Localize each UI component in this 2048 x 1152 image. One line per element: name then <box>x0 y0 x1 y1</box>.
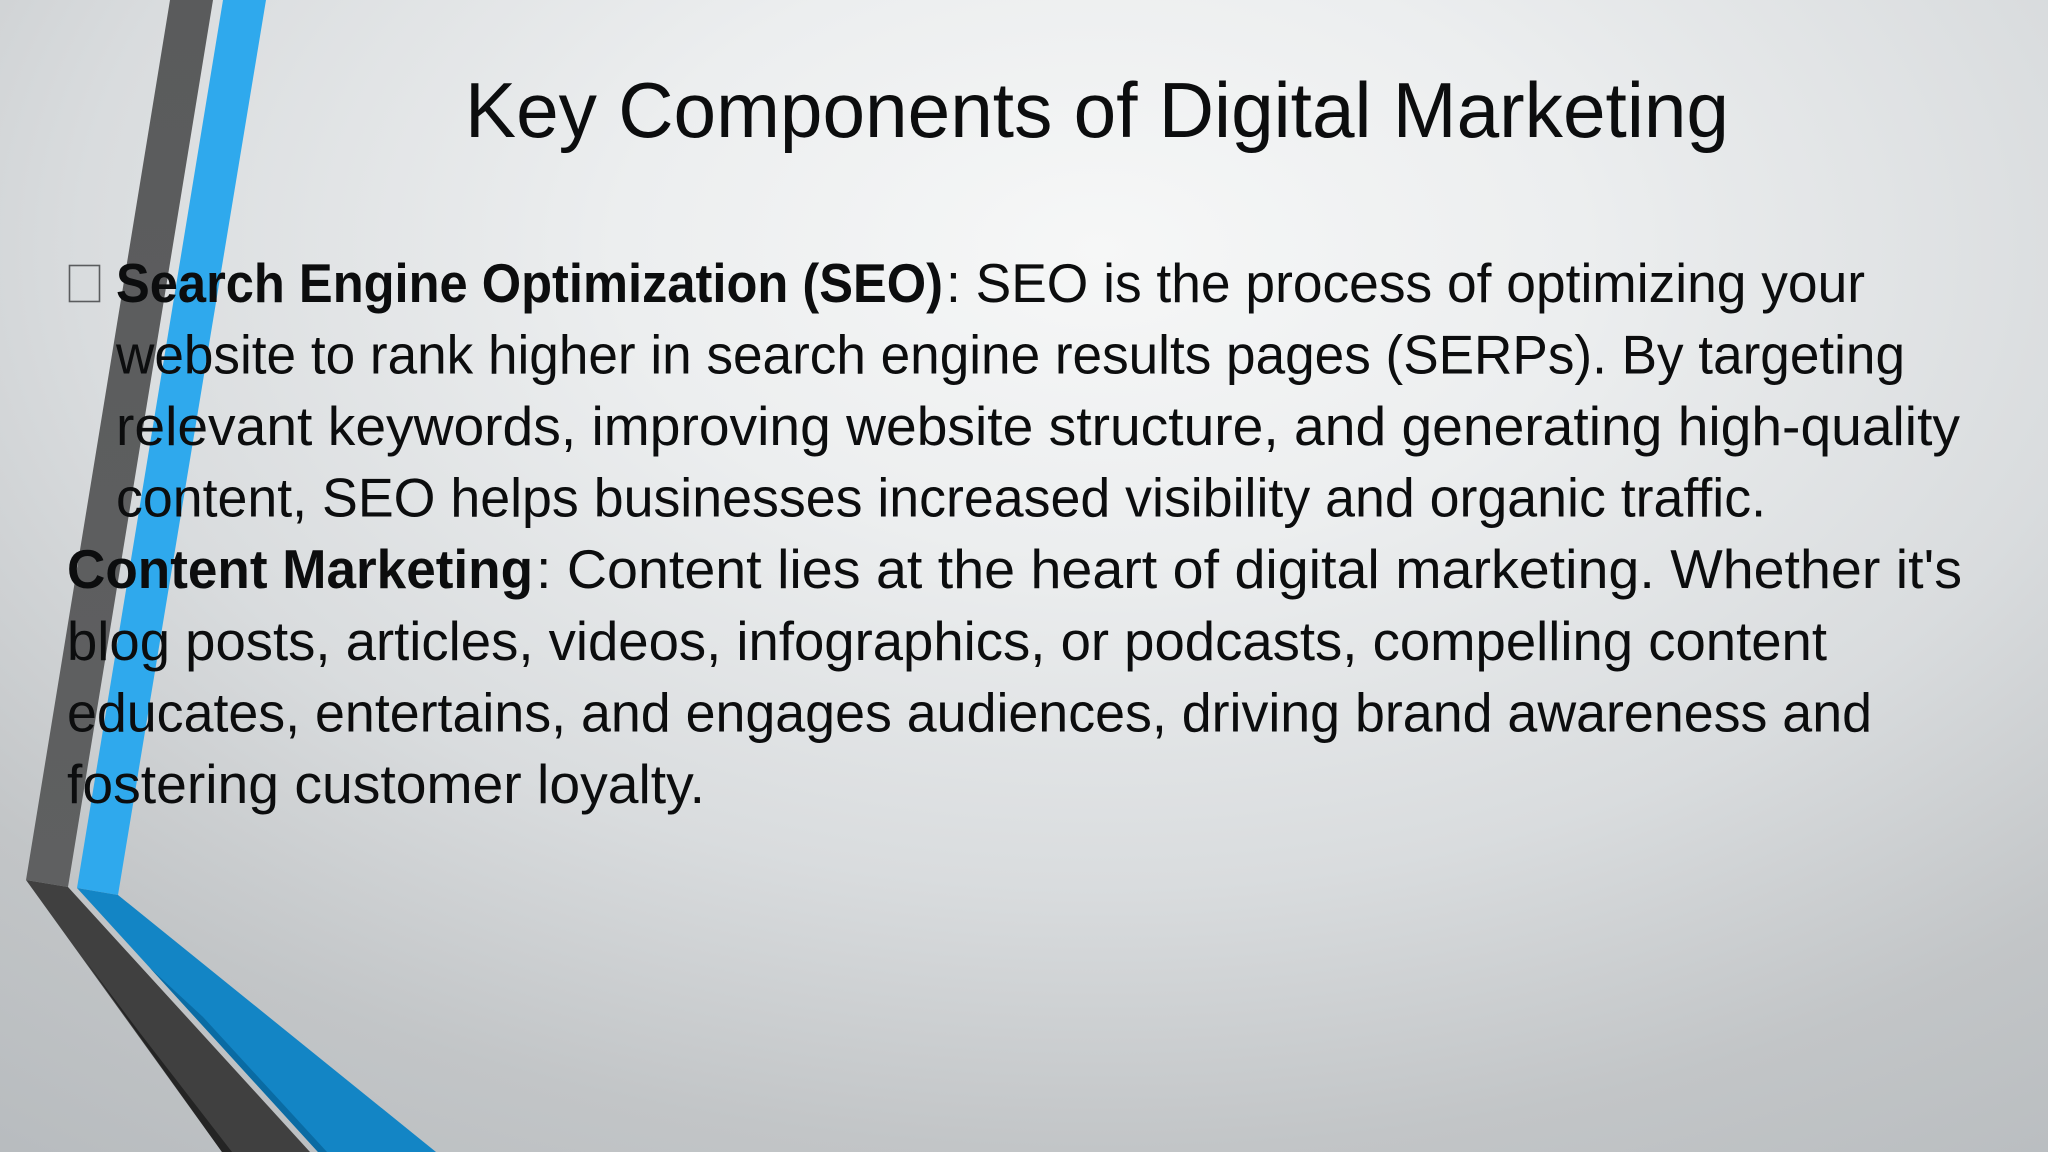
blue stripe lower <box>77 888 436 1152</box>
blue stripe shadow edge <box>150 968 327 1152</box>
decorative chevron stripes <box>26 0 436 1152</box>
dark stripe lower <box>26 880 310 1152</box>
paragraph: search engine optimization: Search Engine Optimization (SEO) <box>116 252 943 314</box>
paragraph: content marketing: Content Marketing <box>67 538 533 600</box>
paragraph: content marketing: educates, entertains, and engages audiences, driving brand awareness and <box>67 682 1872 744</box>
paragraph: search engine optimization <box>115 252 1961 528</box>
paragraph: content marketing: : Content lies at the heart of digital marketing. Whether it's <box>536 538 1962 600</box>
gray stripe upper <box>26 0 213 887</box>
paragraph: content marketing <box>67 538 1962 815</box>
paragraph: search engine optimization: relevant keywords, improving website structure, and generating high-quality <box>116 395 1961 457</box>
title: Key Components of Digital Marketing <box>465 66 1729 154</box>
blue stripe upper <box>77 0 266 895</box>
paragraph: search engine optimization: website to rank higher in search engine results pages (SERPs). By targeting <box>115 324 1905 386</box>
icon: missing-glyph bullet box <box>70 266 100 302</box>
paragraph: search engine optimization: content, SEO helps businesses increased visibility and organic traffic. <box>116 466 1766 528</box>
paragraph: content marketing: blog posts, articles, videos, infographics, or podcasts, compelling content <box>67 610 1827 672</box>
body text <box>67 252 1962 815</box>
paragraph: search engine optimization: : SEO is the process of optimizing your <box>946 252 1865 314</box>
dark stripe shadow edge <box>85 960 232 1152</box>
paragraph: content marketing: fostering customer loyalty. <box>67 753 705 815</box>
